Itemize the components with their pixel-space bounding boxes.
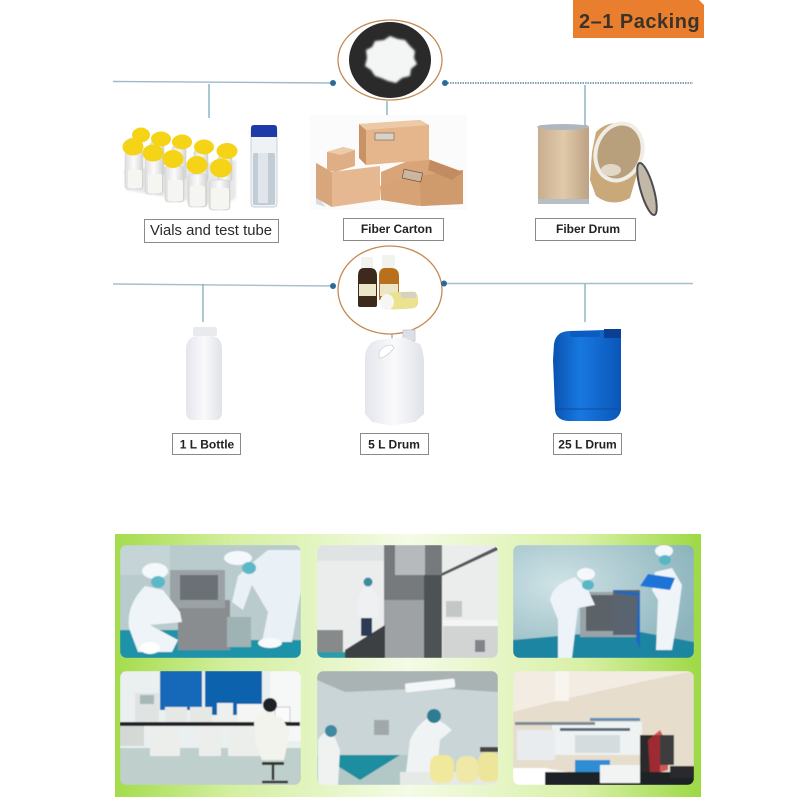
label: 1 L Bottle xyxy=(172,434,240,454)
infographic canvas xyxy=(113,0,704,797)
connector row 2 right xyxy=(441,280,693,286)
drop lines row 2 xyxy=(203,284,585,346)
image: 25 L drum xyxy=(553,329,621,421)
image: vials and test tube xyxy=(122,125,277,210)
connector row 2 left xyxy=(113,283,336,289)
label: 5 L Drum xyxy=(360,434,428,454)
test tube xyxy=(251,125,277,207)
label: Fiber Drum: Fiber Drum xyxy=(556,222,620,236)
drop lines row 1 xyxy=(209,84,585,125)
image: fiber drum xyxy=(537,115,661,217)
connector row 1 right xyxy=(442,80,693,86)
label: 5 L Drum: 5 L Drum xyxy=(368,438,420,452)
label: 1 L Bottle: 1 L Bottle xyxy=(180,438,235,452)
photo: technicians at tablet press xyxy=(120,545,301,658)
photo: chemistry lab bench xyxy=(513,671,694,785)
image: 1 L bottle xyxy=(186,327,222,420)
panel: factory photo grid xyxy=(115,534,701,797)
label: 25 L Drum: 25 L Drum xyxy=(558,438,617,452)
label: 25 L Drum xyxy=(554,434,622,454)
label: Vials and test tube xyxy=(144,220,278,242)
label: Fiber Drum xyxy=(536,218,636,240)
image: 5 L drum xyxy=(365,330,424,426)
photo: stainless reactor room xyxy=(317,545,498,658)
vials xyxy=(122,128,238,210)
image: fiber cartons xyxy=(310,115,467,210)
icon: liquid bottles in circle xyxy=(338,246,442,334)
label: Vials and test tube: Vials and test tube xyxy=(150,222,272,239)
photo: operator with yellow bags xyxy=(317,671,500,785)
heading badge: 2-1 Packing xyxy=(573,0,704,38)
photo: analytical instrument lab xyxy=(120,671,301,785)
heading badge: 2-1 Packing: 2–1 Packing xyxy=(579,11,700,33)
connector row 1 left xyxy=(113,80,336,86)
label: Fiber Carton xyxy=(344,218,444,240)
label: Fiber Carton: Fiber Carton xyxy=(361,222,432,236)
icon: powder dish in circle xyxy=(338,20,442,100)
photo: technicians at blue cabinet xyxy=(513,545,694,658)
